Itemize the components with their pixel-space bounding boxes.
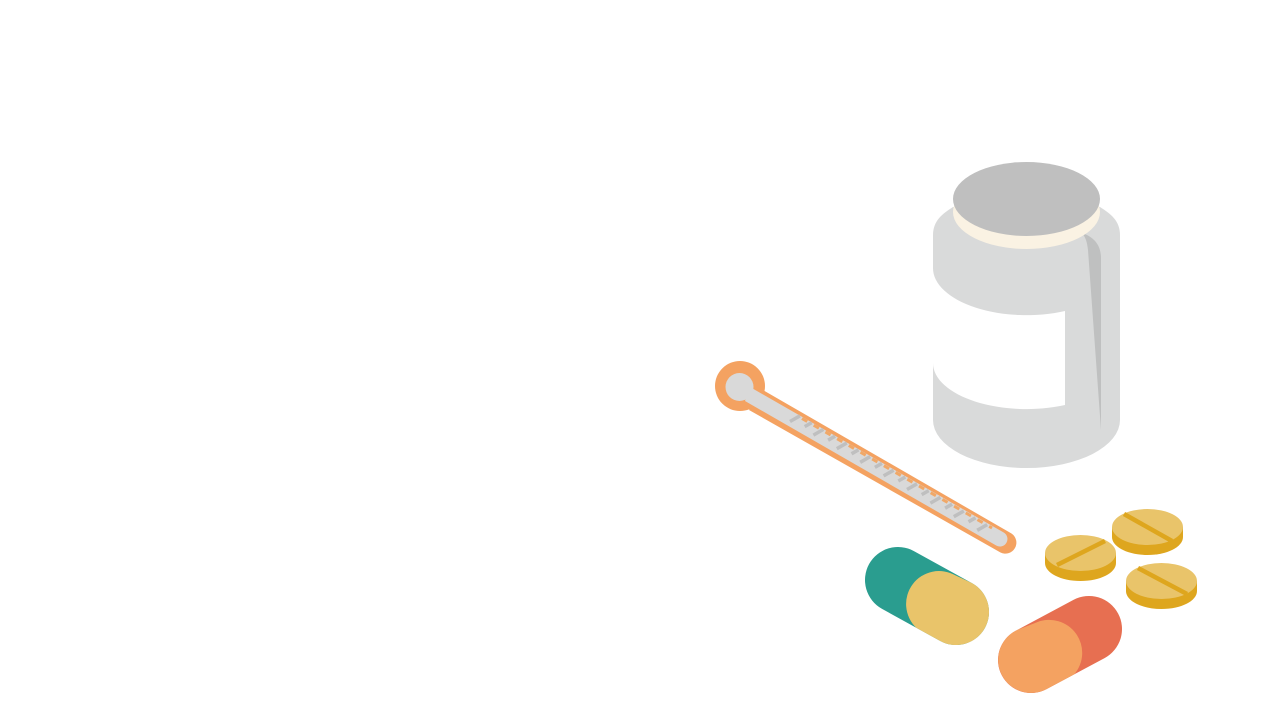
jar body bbox=[933, 207, 1120, 468]
capsule shell red bbox=[1031, 629, 1089, 660]
thermometer orange ticks bbox=[802, 418, 992, 528]
icon: thermometer bbox=[715, 361, 1016, 554]
tablet side bbox=[1045, 553, 1116, 581]
tablet side bbox=[1126, 581, 1197, 609]
tablet score line bbox=[1057, 541, 1105, 565]
thermometer bulb centre bbox=[726, 373, 754, 401]
icon: tablet top bbox=[1112, 509, 1183, 555]
tablet score line bbox=[1124, 514, 1172, 541]
thermometer tube bbox=[745, 387, 1007, 546]
jar label bbox=[933, 268, 1065, 409]
jar shadow bbox=[1082, 233, 1101, 430]
jar lid rim bbox=[953, 175, 1100, 249]
thermometer grey ticks bbox=[790, 416, 987, 530]
tablet top bbox=[1045, 535, 1116, 571]
thermometer casing bbox=[749, 390, 1016, 554]
capsule shell orange bbox=[998, 620, 1082, 693]
icon: tablet right bbox=[1126, 563, 1197, 609]
jar lid bbox=[953, 162, 1100, 236]
icon: tablet left bbox=[1045, 535, 1116, 581]
tablet score line bbox=[1138, 568, 1187, 594]
capsule shell teal bbox=[898, 580, 956, 612]
icon: medicine jar bbox=[933, 162, 1120, 468]
tablet side bbox=[1112, 527, 1183, 555]
capsule shell yellow bbox=[906, 571, 989, 645]
tablet top bbox=[1112, 509, 1183, 545]
tablet top bbox=[1126, 563, 1197, 599]
thermometer bulb bbox=[715, 361, 765, 411]
icon: red and orange capsule bbox=[998, 620, 1089, 693]
icon: teal and yellow capsule bbox=[898, 571, 989, 645]
